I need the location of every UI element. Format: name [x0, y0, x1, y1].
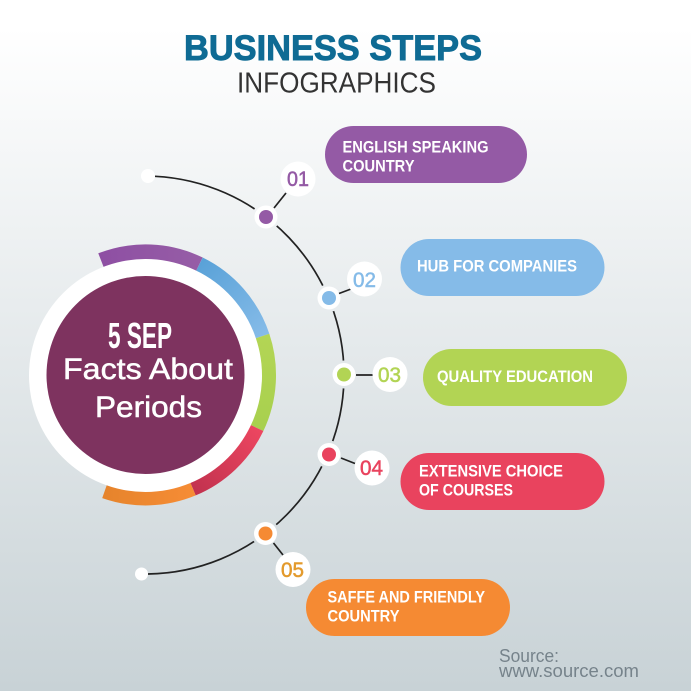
- label pill 01: COUNTRY: [342, 158, 414, 176]
- label pill 01: [325, 126, 527, 183]
- label pill 02: [400, 239, 604, 296]
- centre text: 5 SEP: [108, 315, 172, 356]
- title: [184, 29, 482, 100]
- purple disc: [46, 276, 244, 474]
- number 03: 03: [378, 364, 401, 387]
- node 03: [330, 360, 358, 388]
- node 04: [315, 440, 343, 468]
- step 02: [315, 239, 604, 312]
- label pill 02: HUB FOR COMPANIES: [417, 258, 577, 276]
- central circle: [29, 252, 269, 498]
- step 05: [252, 520, 510, 636]
- centre text: Periods: [95, 391, 202, 424]
- label pill 05: [306, 579, 510, 636]
- connector 04: [341, 458, 355, 464]
- step 04: [315, 440, 604, 510]
- source note: www.source.com: [498, 661, 639, 681]
- number 04: 04: [360, 457, 383, 480]
- arc end dot: [135, 568, 148, 580]
- heading: business steps: BUSINESS STEPS: [184, 29, 482, 68]
- node 05: [252, 520, 280, 548]
- number 05: [276, 552, 310, 587]
- centre text: Facts About: [63, 353, 234, 386]
- node 02: [315, 284, 343, 312]
- label pill 05: COUNTRY: [328, 608, 400, 626]
- segmented colour ring: [101, 252, 269, 498]
- label pill 03: [423, 349, 627, 406]
- number 03: [372, 357, 408, 392]
- step 01: [252, 126, 527, 231]
- number 01: [280, 162, 316, 196]
- node 01: [252, 203, 280, 231]
- centre text: [63, 315, 234, 424]
- number 05: 05: [281, 559, 304, 582]
- subheading: infographics: INFOGRAPHICS: [237, 68, 436, 100]
- connector 01: [274, 193, 286, 208]
- label pill 03: QUALITY EDUCATION: [437, 368, 593, 386]
- connector 05: [274, 543, 283, 555]
- number 02: [347, 262, 382, 296]
- label pill 04: OF COURSES: [419, 482, 513, 500]
- white ring: [29, 259, 262, 492]
- number 01: 01: [287, 168, 309, 191]
- number 04: [354, 450, 390, 486]
- source note: Source:: [499, 646, 559, 666]
- timeline arc: [148, 176, 344, 574]
- step 03: [330, 349, 627, 406]
- number 02: 02: [353, 269, 376, 292]
- label pill 05: SAFFE AND FRIENDLY: [328, 588, 485, 606]
- label pill 04: [400, 453, 604, 510]
- arc start dot: [141, 169, 155, 183]
- connector 03: [356, 374, 373, 376]
- connector 02: [339, 289, 351, 294]
- label pill 01: ENGLISH SPEAKING: [342, 138, 488, 156]
- label pill 04: EXTENSIVE CHOICE: [419, 462, 563, 480]
